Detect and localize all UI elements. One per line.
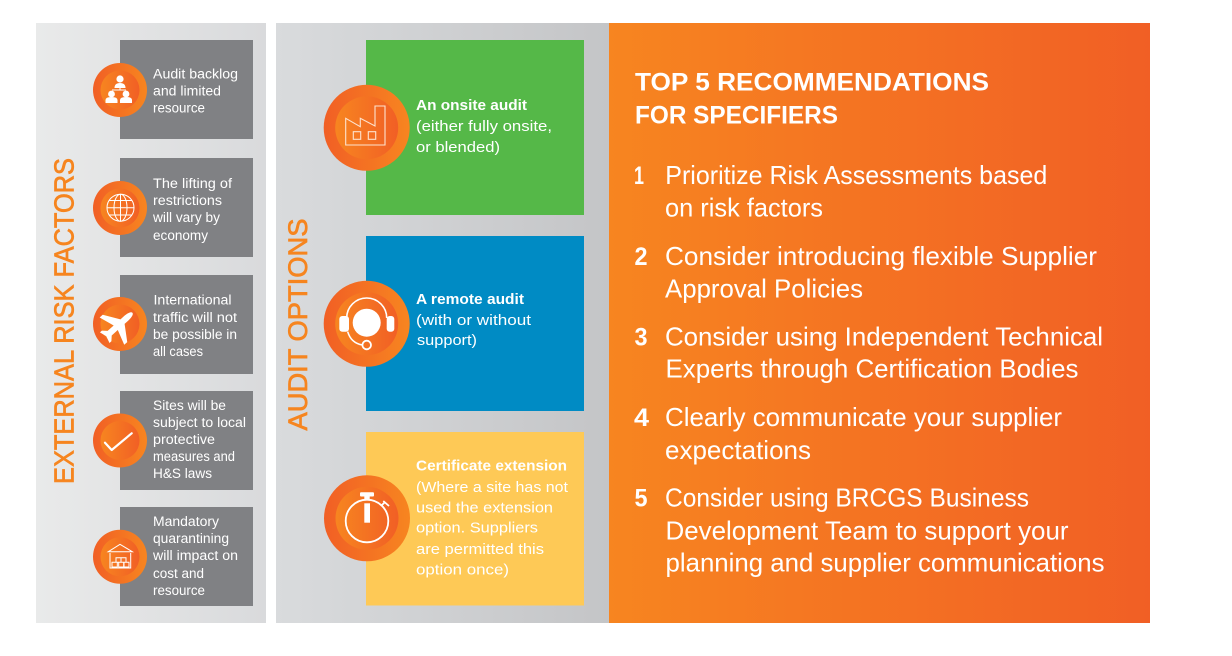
panel background (36, 23, 266, 623)
card: mandatory quarantining: Mandatory (153, 514, 219, 529)
panel: external risk factors (36, 23, 266, 623)
icon: stopwatch (346, 492, 389, 542)
recommendation 1: on risk factors (665, 193, 823, 223)
card: remote audit: (with or without (416, 312, 532, 329)
card: local protective measures: H&S laws (153, 466, 212, 481)
card: mandatory quarantining: resource (153, 583, 205, 598)
card: local protective measures: Sites will be (153, 398, 226, 413)
card: certificate extension: are permitted this (416, 541, 544, 558)
recommendation 2 (634, 241, 1097, 304)
recommendation 2: 2 (634, 243, 648, 271)
panel background (609, 23, 1150, 623)
recommendation 3 (634, 322, 1103, 384)
card: international traffic (92, 275, 253, 374)
card: certificate extension: used the extension (416, 500, 553, 517)
recommendation 5: Development Team to support your (666, 515, 1069, 545)
card: onsite audit: or blended) (416, 139, 500, 156)
heading: external risk factors: EXTERNAL RISK FACTORS (48, 158, 80, 484)
card: local protective measures: subject to local (153, 415, 246, 430)
heading: top 5 recommendations for specifiers: TOP 5 RECOMMENDATIONS (635, 69, 989, 97)
card: audit backlog: and limited (153, 84, 221, 98)
icon: headset (339, 298, 394, 349)
recommendation 1: 1 (634, 162, 644, 190)
card: lifting of restrictions: will vary by (152, 210, 220, 225)
card: certificate extension: option once) (416, 562, 509, 579)
card: audit backlog (93, 40, 253, 139)
card: onsite audit (324, 40, 584, 215)
panel: audit options (276, 23, 609, 623)
card: certificate extension: Certificate extension (416, 458, 567, 475)
card: mandatory quarantining: will impact on (152, 548, 238, 563)
card: remote audit (324, 236, 584, 411)
recommendation 1 (634, 160, 1047, 223)
card: local protective measures: measures and (153, 449, 235, 464)
recommendation 3: Consider using Independent Technical (665, 322, 1103, 352)
recommendation 5: planning and supplier communications (666, 548, 1104, 578)
recommendation 3: 3 (634, 324, 648, 352)
card: lifting of restrictions (93, 158, 253, 257)
card: remote audit: support) (417, 332, 477, 349)
heading: top 5 recommendations for specifiers: FOR SPECIFIERS (635, 101, 838, 129)
heading: audit options: AUDIT OPTIONS (283, 218, 313, 430)
icon: globe (107, 194, 134, 221)
icon: plane (92, 299, 145, 351)
card: mandatory quarantining: cost and (153, 566, 204, 581)
icon: people hierarchy (106, 75, 132, 103)
recommendation 4: Clearly communicate your supplier (665, 402, 1062, 432)
recommendation 5: Consider using BRCGS Business (665, 483, 1029, 513)
icon: factory (346, 106, 385, 145)
card: international traffic: be possible in (153, 327, 237, 342)
recommendation 2: Consider introducing flexible Supplier (665, 241, 1097, 271)
recommendation 1: Prioritize Risk Assessments based (665, 160, 1047, 190)
icon: warehouse (108, 544, 132, 568)
recommendation 4: expectations (665, 435, 811, 465)
card: international traffic: all cases (153, 344, 203, 359)
recommendation 5 (634, 483, 1104, 578)
card: local protective measures: protective (153, 432, 215, 447)
card: certificate extension: option. Suppliers (416, 520, 538, 537)
card: local protective measures (93, 391, 253, 490)
panel: top 5 recommendations (609, 23, 1150, 623)
recommendation 4 (634, 402, 1062, 465)
card: onsite audit: (either fully onsite, (416, 118, 552, 135)
card: audit backlog: resource (153, 100, 205, 116)
recommendation 2: Approval Policies (665, 274, 863, 304)
recommendation 5: 5 (634, 485, 648, 513)
card: mandatory quarantining: quarantining (153, 531, 229, 546)
card: lifting of restrictions: The lifting of (153, 176, 232, 191)
heading: top 5 recommendations for specifiers (635, 69, 989, 129)
card: certificate extension: (Where a site has not (416, 479, 569, 496)
panel background (276, 23, 609, 623)
card: lifting of restrictions: economy (153, 228, 208, 243)
card: audit backlog: Audit backlog (153, 66, 238, 82)
card: international traffic: International (154, 292, 232, 308)
card: mandatory quarantining (93, 507, 253, 606)
recommendation 3: Experts through Certification Bodies (666, 354, 1078, 384)
icon: check mark (105, 433, 132, 450)
card: remote audit: A remote audit (416, 291, 524, 308)
card: international traffic: traffic will not (153, 310, 237, 325)
card: certificate extension (324, 432, 584, 606)
card: lifting of restrictions: restrictions (153, 193, 222, 208)
card: onsite audit: An onsite audit (416, 97, 527, 114)
recommendation 4: 4 (634, 404, 649, 432)
